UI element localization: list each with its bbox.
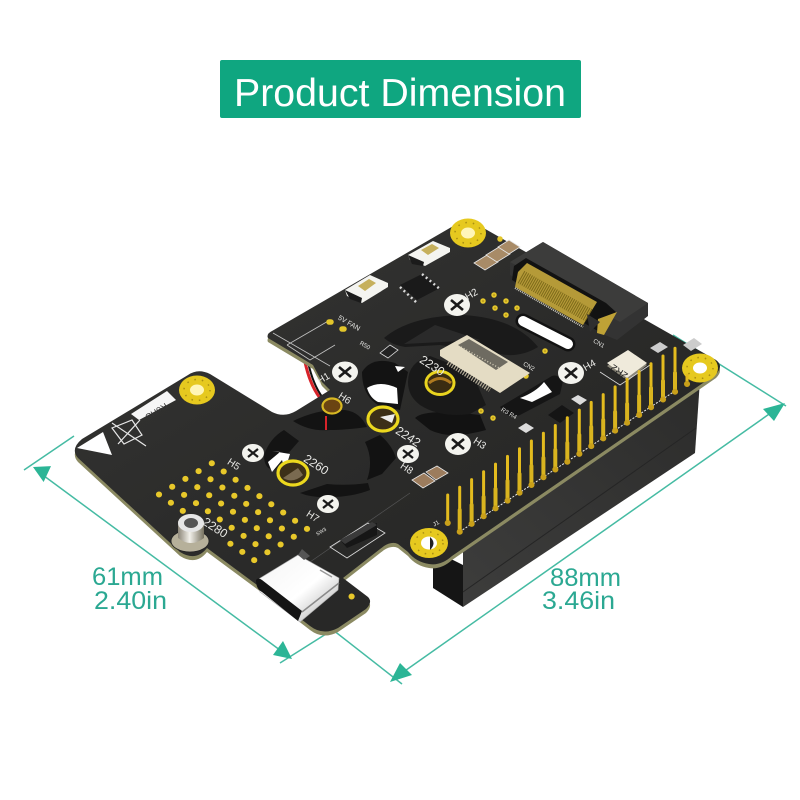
dimension label: 88mm 3.46in — [542, 564, 621, 615]
RoHS tag: RoHS — [144, 401, 169, 422]
chip U4 — [400, 274, 441, 303]
push switches — [345, 241, 450, 303]
gold fan mount rings — [278, 398, 398, 485]
dimension label: 88mm 3.46in: 3.46in — [542, 587, 615, 615]
circuit board — [75, 222, 720, 636]
capacitor group C8 C9 — [412, 466, 448, 488]
silk screen labels: 2230 — [417, 353, 447, 379]
chip U3 — [548, 405, 574, 423]
USB-C connector — [256, 549, 339, 622]
silk screen labels: H2 — [463, 287, 480, 303]
fan opening: right — [365, 435, 396, 480]
silk screen labels: CN1 — [592, 339, 606, 350]
ring: H6 — [322, 398, 342, 414]
fan hub — [408, 356, 486, 415]
silk screen labels: 2242 — [393, 424, 423, 450]
screw H3 — [445, 433, 471, 455]
fan opening: bottom — [415, 412, 486, 435]
red fan wires — [305, 362, 323, 398]
silk screen labels: R3 R4 — [500, 407, 518, 421]
icon: recycling bin — [112, 420, 146, 446]
inductor 2R2: 2R2 — [609, 361, 630, 381]
M.2 connector CN1 — [510, 242, 648, 340]
pin header pins — [448, 348, 687, 532]
ring: 2260 — [278, 461, 308, 485]
inductor 2R2 — [600, 350, 650, 385]
silk screen labels: H7 — [304, 509, 321, 525]
pad: rear left — [179, 376, 215, 404]
screws — [242, 294, 584, 513]
standoff — [171, 514, 209, 552]
board edge — [75, 226, 720, 636]
compliance marks — [77, 391, 176, 455]
big fan 2230 — [362, 315, 563, 435]
fan opening: left — [264, 430, 299, 470]
FPC connector CN2 — [440, 335, 530, 393]
ring: 2242 — [368, 407, 398, 431]
screw H8 — [397, 445, 419, 463]
silk screen labels: 2260 — [301, 452, 331, 478]
silk screen labels: J1 — [432, 520, 441, 528]
small parts — [380, 338, 702, 433]
dimension label: 61mm 2.40in: 61mm — [92, 563, 163, 591]
silk screen labels: SW3 — [315, 527, 328, 537]
capacitor group top — [474, 240, 520, 270]
silk screen labels: H6 — [336, 391, 353, 407]
board surface — [75, 222, 720, 632]
screw H5 — [242, 444, 264, 462]
pad: right — [682, 354, 718, 382]
silk screen labels: H4 — [581, 358, 598, 374]
fan opening: left — [362, 361, 408, 410]
slot and vias — [329, 239, 568, 418]
fan opening: bottom — [300, 483, 370, 497]
screw H4 — [558, 362, 584, 384]
dimension lines — [24, 335, 786, 684]
length dimension line: 88mm — [333, 335, 786, 684]
silk screen labels: 5V FAN — [337, 315, 361, 333]
fan opening: right — [500, 376, 563, 416]
fan opening: top — [384, 315, 538, 355]
silk screen labels: CN2 — [522, 362, 536, 373]
screw H1 — [332, 362, 358, 382]
slide switch — [330, 522, 385, 558]
gold test point matrix — [159, 463, 352, 596]
silk screen labels: 2280 — [200, 515, 230, 541]
silk screen labels: R50 — [358, 341, 371, 352]
width dimension line: 61mm — [24, 436, 345, 663]
silk screen labels: H1 — [315, 371, 332, 387]
fan opening: top — [293, 410, 367, 430]
switch 2 — [408, 241, 450, 266]
screw H2 — [444, 294, 470, 316]
switch 1 — [345, 275, 388, 303]
screw H7 — [317, 495, 339, 513]
dimension label: 61mm 2.40in: 2.40in — [94, 587, 167, 615]
icon: ESD warning — [77, 432, 112, 455]
mounting pads — [179, 218, 718, 558]
silk screen labels — [200, 287, 606, 541]
pad: top — [450, 218, 486, 248]
capacitors — [380, 240, 702, 488]
silk screen labels: H3 — [471, 436, 488, 452]
pad: front — [410, 528, 448, 558]
silk screen labels: H8 — [398, 461, 415, 477]
silk screen labels: H5 — [225, 457, 242, 473]
dimension label: 61mm 2.40in — [92, 563, 167, 615]
title banner — [220, 60, 581, 118]
small fan 2242 — [264, 410, 396, 497]
pin header block — [433, 380, 700, 607]
dimension label: 88mm 3.46in: 88mm — [550, 564, 621, 592]
title banner: Product Dimension — [234, 72, 566, 115]
